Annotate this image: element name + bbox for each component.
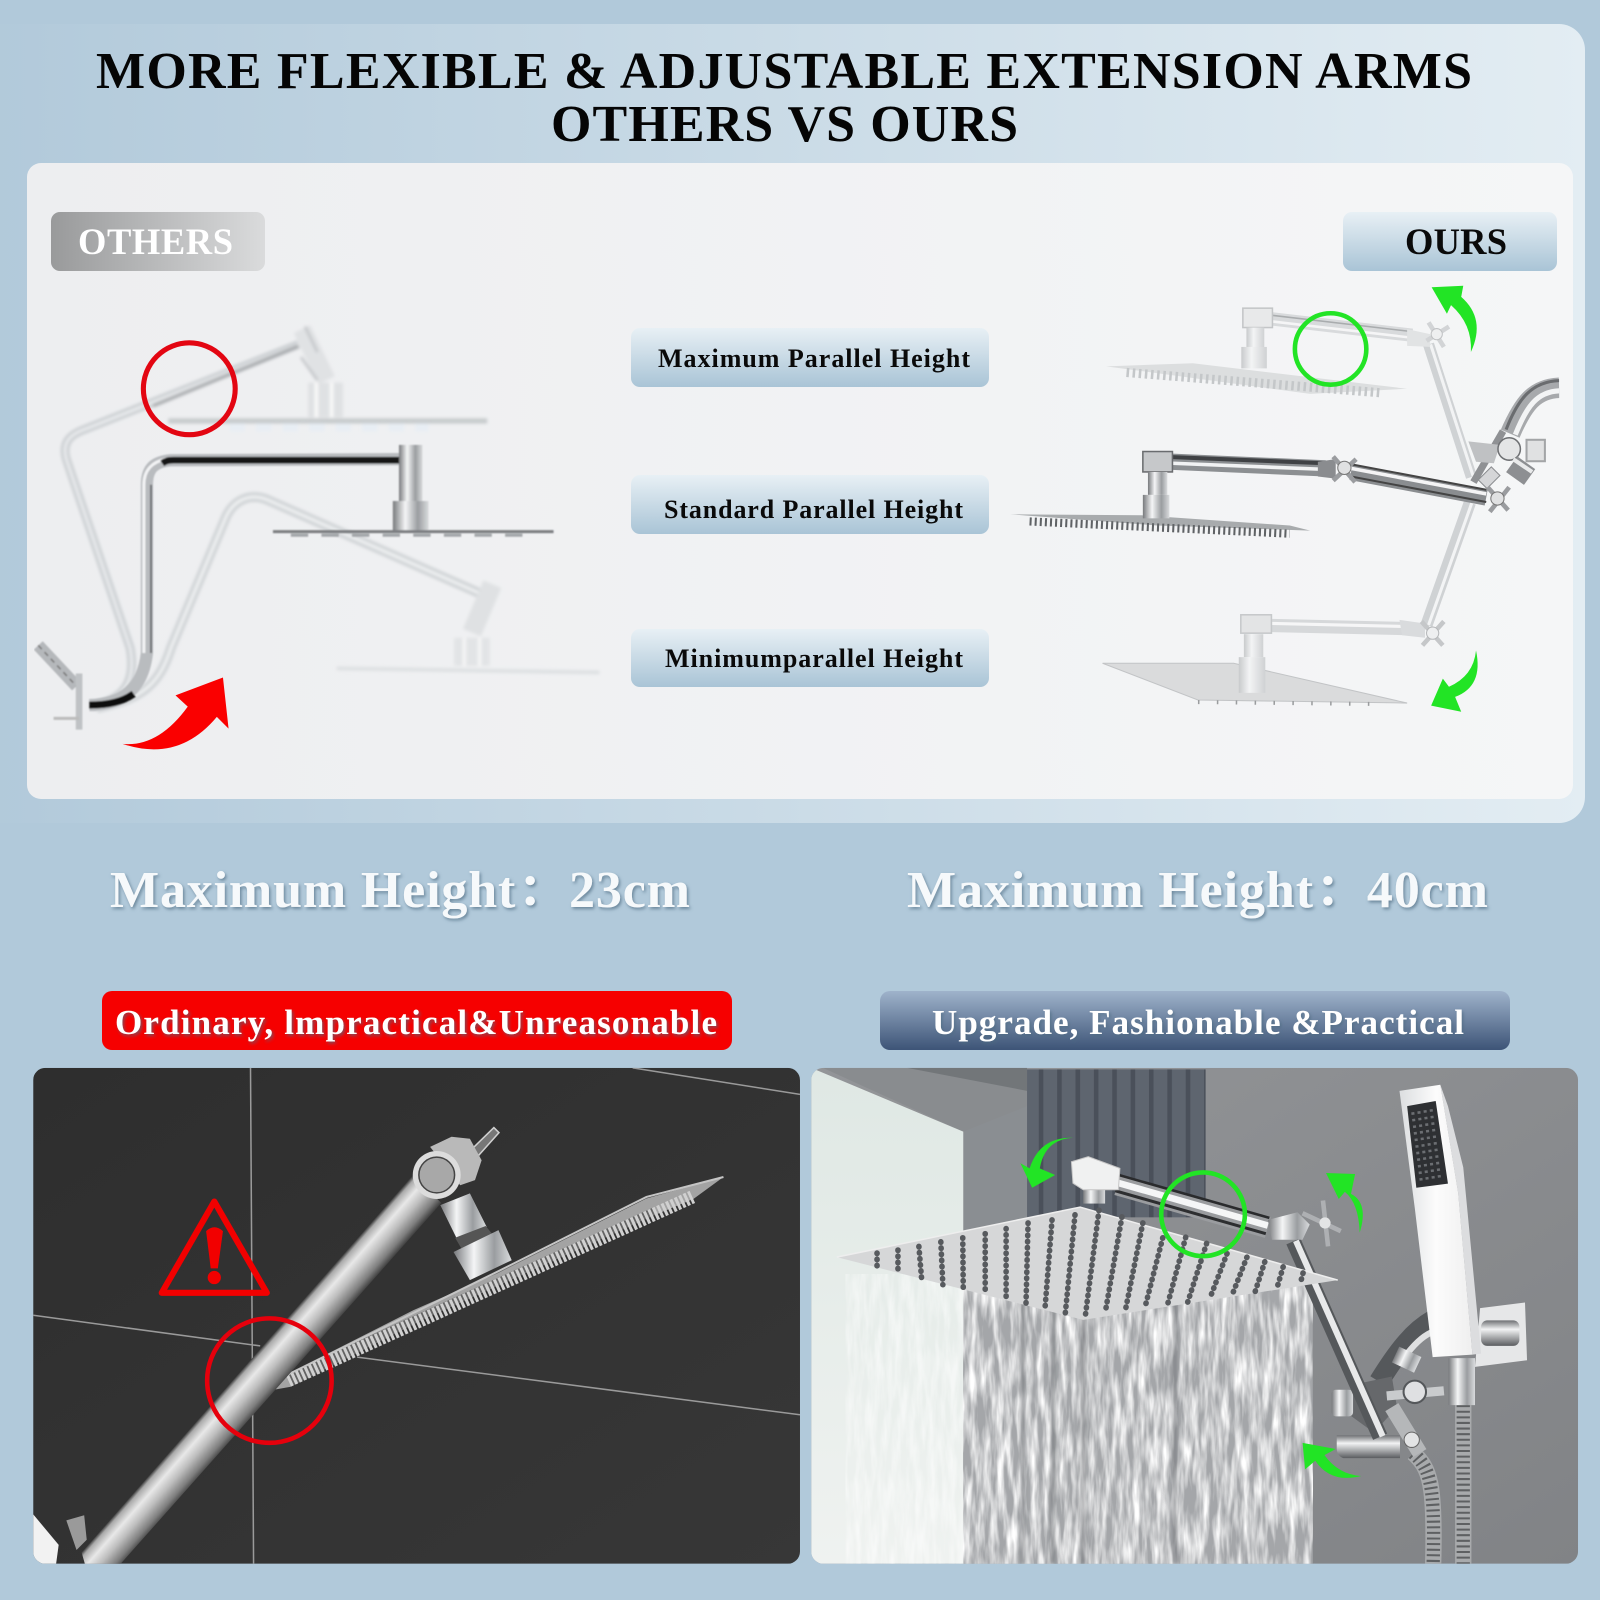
photo: others arm on dark tile (33, 1068, 800, 1570)
arrow: green down (1431, 651, 1478, 712)
horizontal arm (1071, 1157, 1341, 1246)
pivot joint (413, 1128, 499, 1199)
banner: ordinary impractical: Ordinary, lmpractical&Unreasonable (115, 1003, 717, 1042)
label: maximum parallel height: Maximum Parallel Height (658, 344, 970, 373)
label: maximum parallel height (631, 328, 989, 387)
label: minimum parallel height: Minimumparallel Height (665, 644, 963, 673)
panel: top comparison banner (0, 24, 1585, 823)
tag: others: OTHERS (78, 221, 233, 262)
banner: upgrade fashionable (880, 991, 1510, 1050)
circle: green highlight photo (1161, 1172, 1245, 1256)
circle: red problem area (207, 1318, 332, 1443)
shower neck (440, 1193, 512, 1280)
hose (1413, 1405, 1463, 1564)
banner: ordinary impractical (102, 991, 732, 1050)
arrow: red up (122, 678, 229, 749)
hand shower (1399, 1085, 1481, 1357)
diverter mount (1332, 1320, 1475, 1458)
illustration: others shower arms (38, 327, 599, 749)
photo: ours arm in shower (811, 1068, 1578, 1564)
wall mount fragment (33, 1514, 87, 1564)
arrow: green up (1432, 286, 1477, 352)
arrow: green rotate up (1326, 1173, 1363, 1233)
icon: warning triangle (162, 1202, 267, 1293)
background architecture (811, 1068, 1206, 1564)
arm: ours long vertical links (1427, 344, 1473, 625)
title: MORE FLEXIBLE & ADJUSTABLE EXTENSION ARMS (96, 43, 1472, 100)
circle: red highlight (143, 343, 235, 435)
circle: green highlight (1295, 313, 1366, 385)
arrow: green rotate left (1020, 1138, 1073, 1188)
arm: ours top position (1106, 308, 1449, 394)
shower head plate (247, 1177, 723, 1394)
panel: comparison diagram card (27, 163, 1573, 799)
falling water (846, 1274, 1313, 1564)
vertical link (1293, 1241, 1383, 1437)
arm: others standard position (89, 445, 554, 705)
callout: ours maximum height: Maximum Height：40cm (907, 862, 1488, 919)
title (96, 43, 1472, 153)
tag: others (51, 212, 265, 271)
big arm (82, 1175, 441, 1570)
square rain head (837, 1207, 1338, 1320)
arm: ours hand shower mount (1468, 381, 1559, 489)
illustration: ours shower arms (1010, 286, 1559, 712)
title: OTHERS VS OURS (551, 96, 1018, 153)
arm: others top position (65, 327, 487, 707)
callout: others maximum height: Maximum Height：23cm (110, 862, 690, 919)
label: standard parallel height (631, 475, 989, 534)
arm: ours minimum position (1103, 615, 1444, 704)
hand shower bracket (1475, 1303, 1527, 1367)
tag: ours (1343, 212, 1557, 271)
arm: others low position (97, 497, 599, 708)
wall mount: others (38, 645, 79, 730)
arrow: green rotate bottom (1303, 1443, 1361, 1478)
tag: ours: OURS (1405, 221, 1507, 262)
label: standard parallel height: Standard Parallel Height (664, 495, 963, 524)
banner: upgrade fashionable: Upgrade, Fashionable &Practical (932, 1003, 1464, 1042)
label: minimum parallel height (631, 629, 989, 687)
arm: ours standard position (1010, 452, 1509, 534)
